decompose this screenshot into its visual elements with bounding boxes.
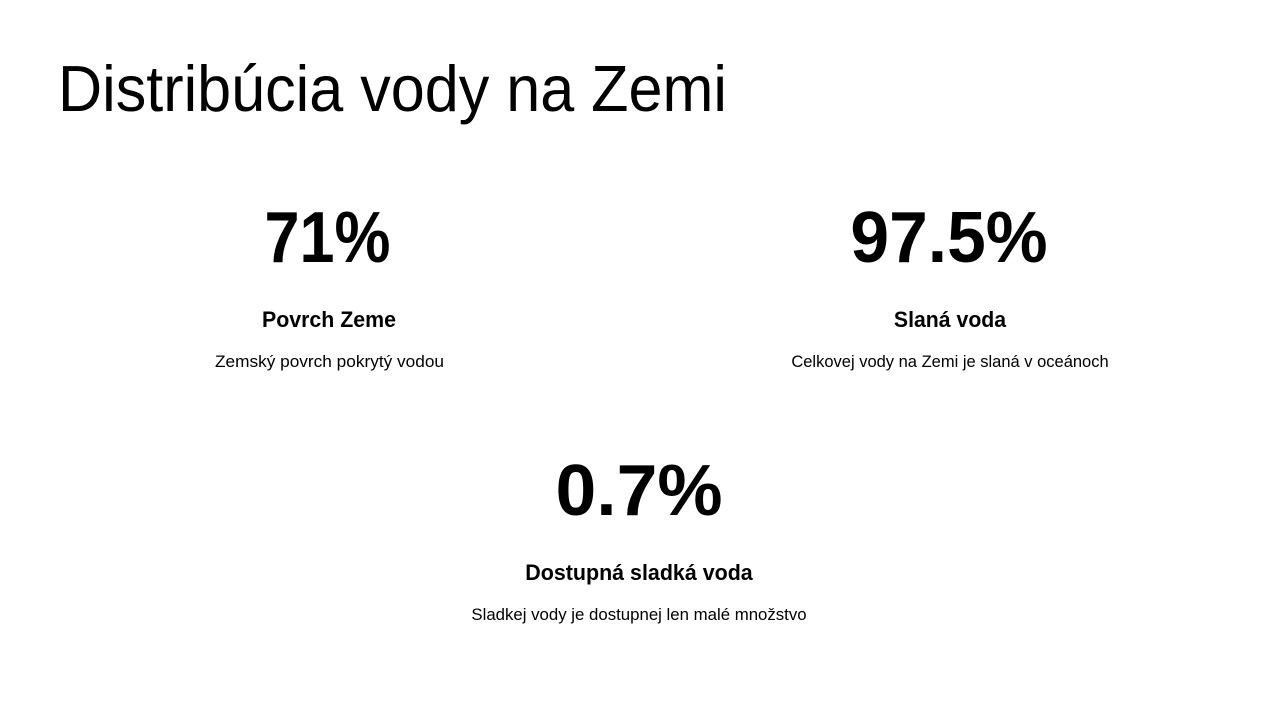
heading Slaná voda: Slaná voda [894,307,1006,332]
title: Distribúcia vody na Zemi [58,52,727,125]
value 71%: 71% [265,198,390,278]
heading Dostupná sladká voda: Dostupná sladká voda [525,560,753,585]
description: Zemský povrch pokrytý vodou [215,353,444,371]
stat: 0.7% fresh water [471,451,807,624]
stat: 71% surface [215,198,444,371]
value 97.5%: 97.5% [850,198,1048,278]
stat: 97.5% salt water [791,198,1109,371]
heading Povrch Zeme: Povrch Zeme [262,307,396,332]
value 0.7%: 0.7% [555,451,723,531]
description: Celkovej vody na Zemi je slaná v oceánoch [791,353,1109,371]
description: Sladkej vody je dostupnej len malé množstvo [471,606,807,624]
